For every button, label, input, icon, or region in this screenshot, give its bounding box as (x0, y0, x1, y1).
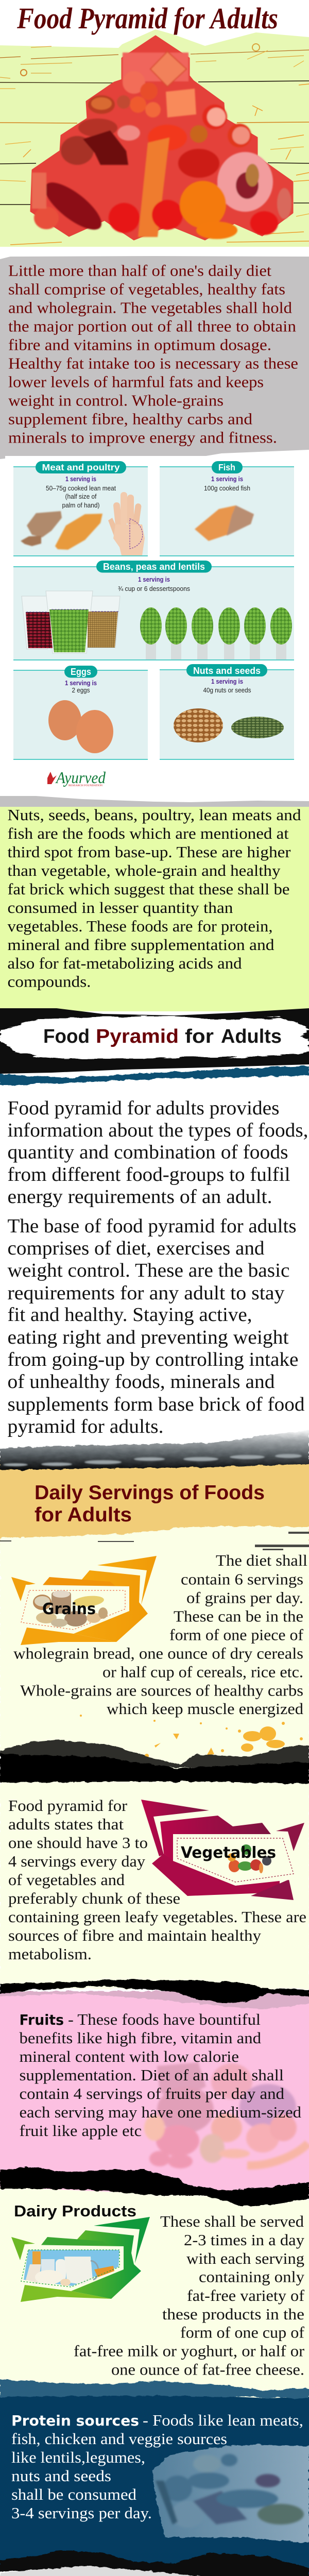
body text: mineral content with low calorie (20, 2048, 239, 2065)
paragraph: form of one piece of (169, 1626, 304, 1643)
icon: milk bottles and cheese (24, 2250, 119, 2286)
paragraph: fat-free variety of (187, 2287, 305, 2304)
mauve brush edge (0, 1991, 309, 2009)
paragraph: what the food pyramid provides: Food pyramid for adults provides (7, 1097, 279, 1119)
section: dairy products (0, 2167, 309, 2401)
paragraph: base of the food pyramid: The base of food pyramid for adults (7, 1215, 297, 1237)
paragraph: one ounce of fat-free cheese. (111, 2361, 304, 2378)
body text (11, 2412, 303, 2522)
paragraph: preferably chunk of these (8, 1890, 180, 1907)
heading: Eggs (71, 667, 91, 677)
paragraph (11, 2412, 303, 2522)
hero: wooden background and food pyramid (0, 2, 309, 247)
body text: 3-4 servings per day. (11, 2504, 152, 2522)
paragraph: Nuts, seeds, beans, poultry, lean meats and (7, 806, 301, 824)
banner heading: for (185, 1026, 214, 1047)
black brush band (0, 1739, 309, 1784)
paragraph: vegetables. These foods are for protein, (7, 918, 273, 935)
body text: each serving may have one medium-sized (20, 2104, 301, 2121)
section: protein sources (0, 2379, 309, 2576)
paragraph: base of the food pyramid: fit and healthy. Staying active, (7, 1304, 252, 1326)
decorative orange splatter (80, 1715, 303, 1758)
icon: pile of seeds (231, 717, 284, 738)
serving size text: 40g nuts or seeds (203, 686, 251, 694)
decorative brush specks (0, 1532, 309, 1550)
badge: vegetables (141, 1800, 304, 1900)
panel: eggs (13, 666, 148, 759)
paragraph: what the food pyramid provides: energy requirements of an adult. (7, 1186, 272, 1208)
ink brush band (0, 1430, 309, 1470)
body text: - These foods have bountiful (68, 2011, 261, 2028)
intro panel: gray background with text (0, 256, 309, 459)
cream background (0, 2187, 309, 2401)
paragraph: form of one cup of (180, 2324, 305, 2341)
paragraph: These can be in the (174, 1607, 303, 1625)
icon: three glasses (22, 591, 120, 653)
heading: Beans, peas and lentils (103, 562, 205, 572)
section: fruits (0, 1979, 309, 2195)
serving size text: (half size of (65, 493, 97, 500)
body text: contain 4 servings of fruits per day and (20, 2085, 284, 2103)
paragraph: base of the food pyramid: requirements for any adult to stay (7, 1282, 284, 1304)
serving size text: ¾ cup or 6 dessertspoons (118, 585, 190, 592)
label: Grains (42, 1600, 96, 1618)
paragraph: what the food pyramid provides: quantity and combination of foods (7, 1142, 288, 1163)
serving size text: 1 serving is (211, 677, 243, 685)
paragraph: what the food pyramid provides (7, 1097, 308, 1208)
serving size text: 1 serving is (211, 475, 243, 483)
paragraph: what the food pyramid provides: from different food-groups to fulfil (7, 1164, 290, 1185)
serving size text: 50–75g cooked lean meat (46, 484, 116, 492)
paragraph: fat brick which suggest that these shall be (7, 880, 289, 898)
logo: Ayurved: Ayurved (55, 768, 106, 787)
paragraph (8, 1797, 306, 1963)
paragraph: than vegetable, whole-grain and healthy (7, 862, 281, 879)
serving size text: 1 serving is (65, 679, 97, 687)
serving size text (203, 677, 251, 694)
intro paragraph: the major portion out of all three to obtain (8, 317, 296, 335)
body text: like lentils,legumes, (11, 2449, 145, 2466)
heading: for Adults (35, 1504, 132, 1526)
serving size text (118, 575, 190, 592)
paragraph: contain 6 servings (181, 1570, 303, 1588)
paragraph: what the food pyramid provides: information about the types of foods, (7, 1120, 308, 1141)
intro paragraph: lower levels of harmful fats and keeps (8, 373, 264, 391)
pyramid food collage (32, 52, 291, 239)
banner heading: Adults (221, 1026, 282, 1047)
intro paragraph: minerals to improve energy and fitness. (8, 429, 277, 446)
gray brush band (0, 796, 309, 807)
black brush band (0, 2550, 309, 2576)
black brush top (0, 1979, 309, 2003)
body text: supplementation. Diet of an adult shall (20, 2066, 284, 2084)
icon: salmon (195, 505, 254, 541)
paragraph: of grains per day. (186, 1589, 303, 1606)
paragraph: These shall be served (160, 2213, 304, 2230)
ink stone texture (3, 1454, 302, 1466)
banner heading: Food (43, 1026, 90, 1047)
body text (20, 2011, 301, 2140)
pyramid silhouette (31, 36, 293, 240)
intro paragraph: supplement fibre, healthy carbs and (8, 410, 252, 428)
icon: vegetable pile (228, 1844, 271, 1873)
body text: fish, chicken and veggie sources (11, 2430, 227, 2448)
serving size text: 1 serving is (65, 475, 96, 483)
paragraph: The diet shall (216, 1552, 307, 1569)
paragraph: base of the food pyramid: pyramid for adults. (7, 1416, 164, 1437)
serving size text (46, 475, 116, 509)
serving size text: palm of hand) (62, 501, 100, 509)
paragraph: consumed in lesser quantity than (7, 899, 233, 917)
black brush band (0, 2167, 309, 2206)
paragraph: base of the food pyramid: eating right and preventing weight (7, 1327, 289, 1348)
section: fat and oils (0, 2550, 309, 2576)
icon: two eggs (48, 700, 113, 753)
paragraph: Food pyramid for (8, 1797, 127, 1815)
heading: Fish (218, 462, 235, 472)
paragraph: fish are the foods which are mentioned at (7, 825, 289, 842)
icon: pork chop (21, 511, 62, 546)
heading: Nuts and seeds (193, 666, 261, 676)
paragraph: compounds. (7, 973, 91, 990)
serving size text: 100g cooked fish (204, 484, 250, 492)
paragraph: one should have 3 to (8, 1834, 148, 1852)
intro paragraph: weight in control. Whole-grains (8, 392, 224, 409)
banner heading: Pyramid (96, 1026, 179, 1047)
paragraph: containing green leafy vegetables. These are (8, 1908, 306, 1926)
banner heading (43, 1026, 282, 1047)
panel: fish (160, 461, 294, 556)
watermark: fruit pile (144, 2062, 308, 2168)
paragraph: 2-3 times in a day (184, 2231, 305, 2249)
dashed outline (21, 2250, 119, 2287)
gray speckled brush (0, 2564, 309, 2576)
paragraph: third spot from base-up. These are higher (7, 843, 290, 861)
intro paragraph: shall comprise of vegetables, healthy fats (8, 280, 285, 298)
paragraph: metabolism. (8, 1945, 92, 1963)
label: Fruits: Fruits (20, 2011, 64, 2028)
paragraph (74, 2213, 305, 2378)
serving size text (65, 679, 97, 694)
watermark: protein foods patch (152, 2445, 309, 2543)
label: Vegetables (181, 1844, 276, 1862)
label: Protein sources: Protein sources (11, 2412, 139, 2429)
paragraph: fat-free milk or yoghurt, or half or (74, 2342, 304, 2360)
paragraph: mineral and fibre supplementation and (7, 936, 274, 954)
icon: hand with dashed palm (108, 492, 145, 555)
panel: beans, peas and lentils (13, 561, 294, 660)
paragraph: containing only (199, 2268, 305, 2285)
cream background (0, 1526, 309, 1989)
body text: fruit like apple etc (20, 2122, 142, 2140)
paragraph: with each serving (186, 2250, 304, 2267)
body text: shall be consumed (11, 2486, 136, 2503)
paragraph: of vegetables and (8, 1871, 125, 1889)
section: daily servings heading band (0, 1430, 309, 1546)
intro paragraph: and wholegrain. The vegetables shall hold (8, 299, 292, 316)
pink background (0, 1992, 309, 2195)
section: grains (0, 1526, 309, 1989)
lighter brush edge (0, 2379, 309, 2398)
paragraph: wholegrain bread, one ounce of dry cereals (13, 1645, 303, 1662)
badge: grains (11, 1556, 157, 1645)
navy background (0, 2393, 309, 2576)
tan band (0, 1461, 309, 1546)
heading: Daily Servings of Foods (35, 1482, 265, 1504)
paragraph: or half cup of cereals, rice etc. (102, 1663, 303, 1681)
paragraph (20, 2011, 301, 2140)
panel: nuts and seeds (160, 664, 294, 759)
paragraph: these products in the (162, 2306, 304, 2323)
paragraph: adults states that (8, 1816, 124, 1833)
paragraph: base of the food pyramid: of unhealthy foods, minerals and (7, 1371, 275, 1393)
white background (0, 2563, 309, 2576)
paragraph: base of the food pyramid: supplements form base brick of food (7, 1394, 305, 1415)
serving size text (204, 475, 250, 492)
panel background (0, 256, 309, 459)
body text: benefits like high fibre, vitamin and (20, 2029, 261, 2047)
brush banner: Food Pyramid for Adults (0, 1008, 309, 1086)
icon: chicken (55, 514, 102, 550)
paragraph: 4 servings every day (8, 1853, 146, 1870)
serving size text: 1 serving is (138, 575, 170, 583)
section: vegetables (8, 1797, 306, 1963)
paragraph: base of the food pyramid: weight control. These are the basic (7, 1260, 289, 1281)
paragraph: Whole-grains are sources of healthy carbs (20, 1682, 303, 1699)
paragraph: also for fat-metabolizing acids and (7, 955, 242, 972)
paragraph: base of the food pyramid (7, 1215, 305, 1437)
logo: Ayurved: RESEARCH FOUNDATION (68, 785, 102, 787)
icon: six spoons of peas (140, 607, 292, 659)
badge: dairy (11, 2217, 150, 2302)
panel background (0, 807, 309, 1011)
section: lime panel with nuts and seeds text (0, 796, 309, 1011)
panel: meat and poultry (13, 461, 148, 556)
paragraph: base of the food pyramid: from going-up by controlling intake (7, 1349, 299, 1370)
heading (35, 1482, 265, 1526)
paragraph: which keep muscle energized (107, 1700, 303, 1718)
intro paragraph: Little more than half of one's daily diet (8, 262, 272, 279)
intro paragraph: Healthy fat intake too is necessary as these (8, 354, 298, 372)
paragraph (7, 806, 301, 990)
heading: Meat and poultry (42, 462, 120, 472)
body text: nuts and seeds (11, 2467, 111, 2485)
paragraph: sources of fibre and maintain healthy (8, 1927, 262, 1944)
intro paragraph (8, 262, 298, 446)
icon: pile of nuts (174, 708, 223, 742)
paragraph (13, 1552, 307, 1718)
heading: Dairy Products (14, 2202, 136, 2220)
icon: grain bowls (33, 1590, 108, 1627)
serving size text: 2 eggs (72, 686, 90, 694)
intro paragraph: fibre and vitamins in optimum dosage. (8, 336, 271, 353)
wood planks background (0, 29, 309, 247)
body text: - Foods like lean meats, (143, 2412, 303, 2429)
paragraph: base of the food pyramid: comprises of diet, exercises and (7, 1238, 265, 1259)
